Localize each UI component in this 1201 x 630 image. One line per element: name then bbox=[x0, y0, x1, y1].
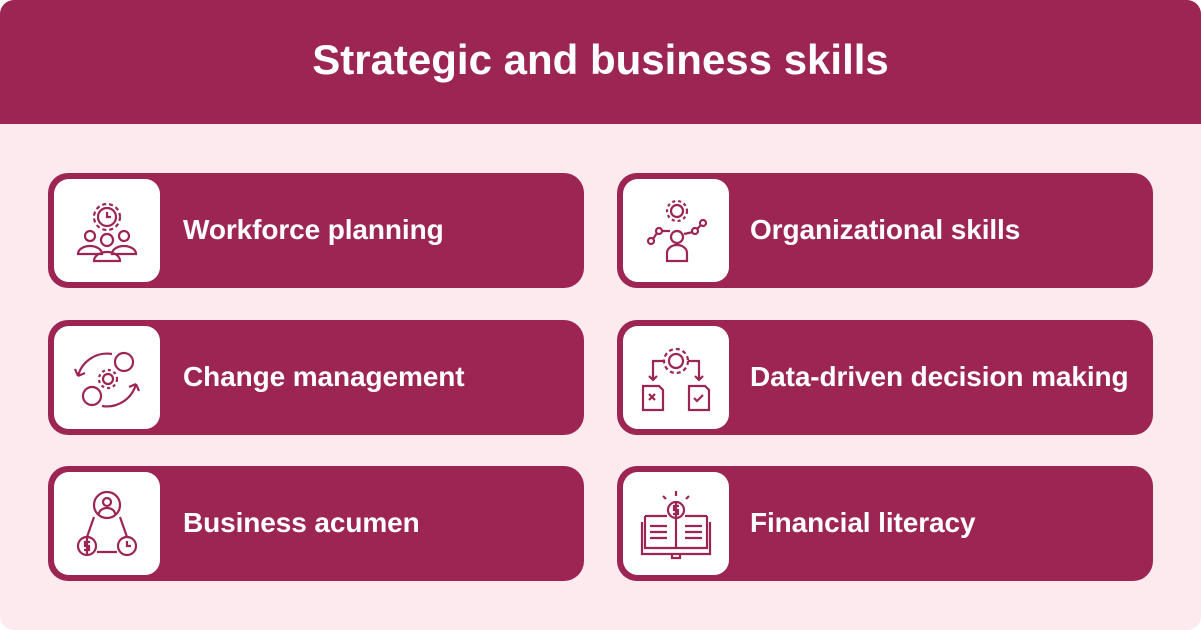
card: organizational skills: Organizational skills bbox=[750, 214, 1020, 245]
icon: people with gear clock bbox=[54, 179, 160, 282]
card: change management: Change management bbox=[183, 361, 464, 392]
icon: change arrows bbox=[54, 326, 160, 429]
title bbox=[0, 0, 1201, 124]
card: business acumen bbox=[48, 466, 584, 581]
icon: book with dollar bbox=[623, 472, 729, 575]
icon: decision documents bbox=[623, 326, 729, 429]
title: Strategic and business skills bbox=[312, 36, 889, 83]
card: organizational skills bbox=[617, 173, 1153, 288]
card: data-driven decision making bbox=[617, 320, 1153, 435]
card: financial literacy: Financial literacy bbox=[750, 507, 975, 538]
card: business acumen: Business acumen bbox=[183, 507, 420, 538]
card: financial literacy bbox=[617, 466, 1153, 581]
card: change management bbox=[48, 320, 584, 435]
card: workforce planning: Workforce planning bbox=[183, 214, 444, 245]
card: workforce planning bbox=[48, 173, 584, 288]
icon: person with network bbox=[623, 179, 729, 282]
icon: person money time bbox=[54, 472, 160, 575]
card: data-driven decision making: Data-driven decision making bbox=[750, 361, 1129, 392]
